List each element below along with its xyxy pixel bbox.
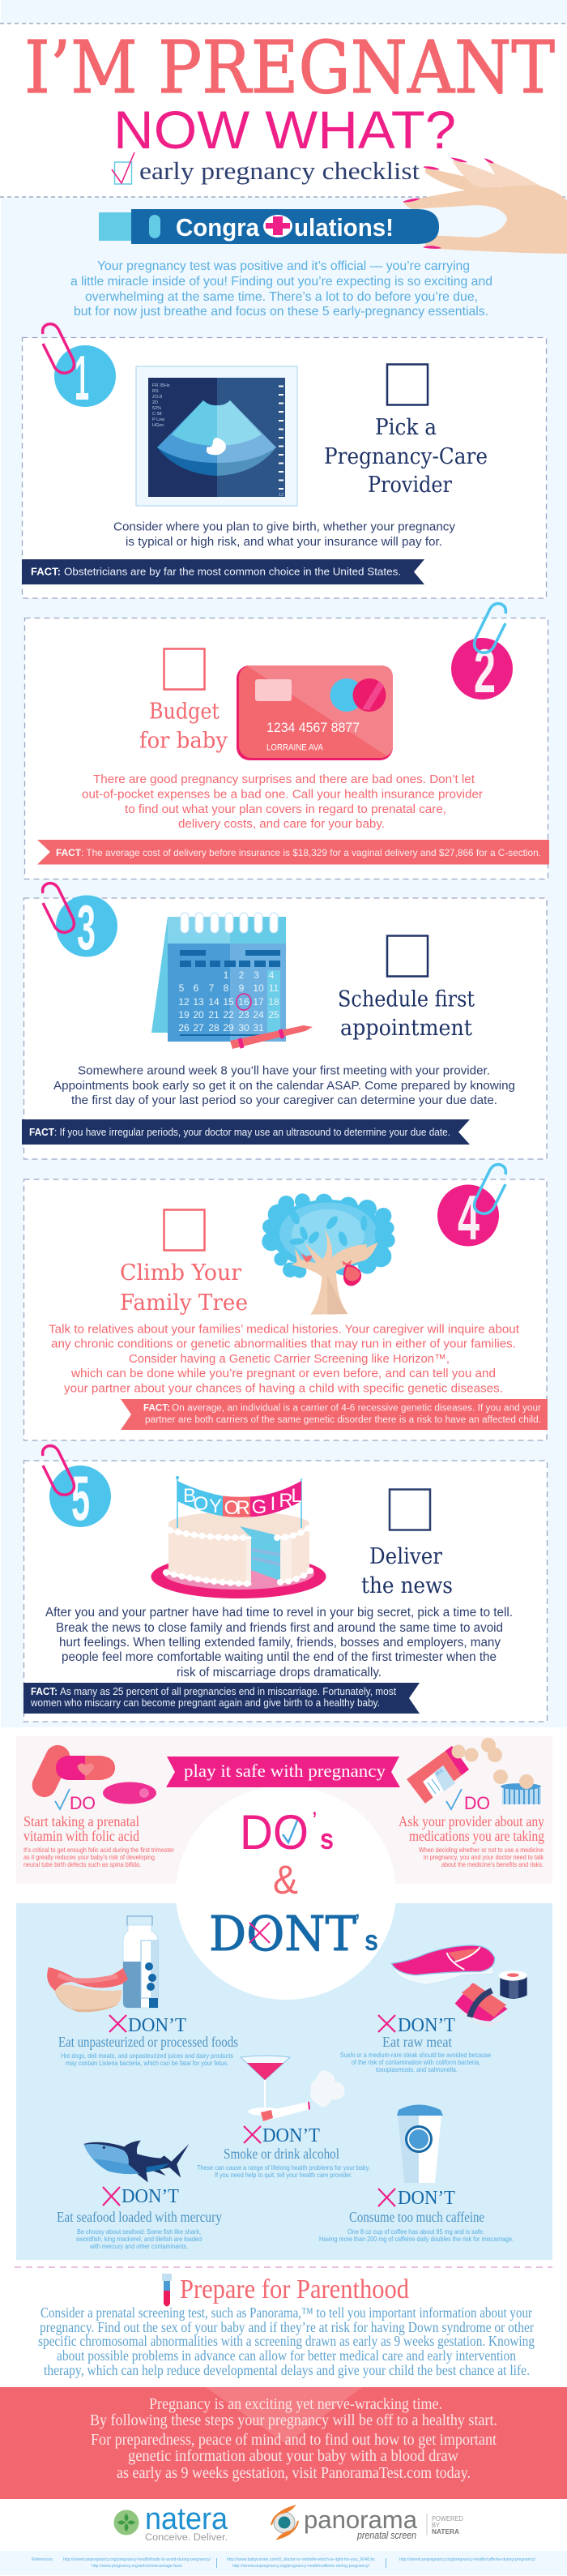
heading [361,1544,453,1598]
heading: congratulations [176,213,394,242]
don't mark: DON’T [398,2188,455,2209]
body text [82,772,483,831]
icon: calendar: 17 [253,996,264,1008]
panel: closing message: By following these steps your pregnancy will be off to a healthy start. [90,2412,497,2429]
icon: coffee cup [397,2104,443,2183]
fact ribbon: women who miscarry can become pregnant again and give birth to a healthy baby. [30,1697,380,1709]
fact ribbon: As many as 25 percent of all pregnancies end in miscarriage. Fortunately, most [60,1686,396,1697]
panel: step 2 budget for baby [24,604,549,879]
trunk and branches [292,1230,378,1315]
don't: raw meat [340,1945,527,2073]
logo: panorama [271,2505,463,2541]
heading: Pick a [375,415,437,440]
paragraph [38,2304,535,2378]
panel: closing message [0,2387,567,2499]
text: Smoke or drink alcohol [224,2146,339,2162]
sushi roll [499,1971,527,1999]
banner: boy or girl: R [279,1490,293,1512]
heading [139,699,228,754]
banner: play it safe [166,1757,400,1787]
number badge 3: 3 [77,892,96,963]
references [0,2551,567,2575]
body text [49,1323,520,1396]
number badge 4: 4 [458,1182,480,1253]
fact ribbon: : If you have irregular periods, your doctor may use an ultrasound to determine your due date. [54,1127,450,1138]
references: http://americanpregnancy.org/pregnancy-health/caffeine-during-pregnancy/ [232,2564,369,2569]
body text: to find out what your plan covers in regard to prenatal care, [125,802,446,816]
heading: the news [361,1573,453,1598]
icon: calendar [151,913,313,1049]
don't: processed foods [47,1916,238,2067]
icon: calendar: 13 [193,996,204,1008]
text: Start taking a prenatal [23,1813,139,1829]
logo: natera: Conceive. Deliver. [145,2533,228,2543]
fact ribbon: FACT: [31,1686,58,1697]
icon: test stick [99,209,439,244]
number badge 1: 1 [75,342,89,413]
icon: blood test tube [162,2274,172,2307]
body text [45,1606,513,1680]
icon: calendar: 26 [178,1022,190,1033]
icon: credit card: 1234 4567 8877 [266,720,360,735]
icon: calendar: 8 [224,982,229,994]
heading: Pregnancy-Care [324,444,488,469]
icon: ultrasound: ZO.8 [152,395,162,400]
panel: closing message: genetic information about your baby with a blood draw [128,2448,458,2465]
logo: natera [113,2502,228,2543]
icon: calendar: 31 [253,1022,264,1033]
baby bundle [342,1260,361,1286]
icon: calendar: 27 [193,1022,204,1033]
icon: calendar: 9 [239,982,245,994]
body text: There are good pregnancy surprises and there are bad ones. Don’t let [93,772,475,786]
intro text: Your pregnancy test was positive and it’s official — you’re carrying [97,259,470,273]
don'ts: DONT [209,1906,356,1962]
icon: calendar: 20 [193,1009,204,1021]
text [319,2209,514,2243]
banner: boy or girl: G [252,1496,266,1518]
logo: panorama: POWERED [432,2515,463,2523]
icon: bottle cap [501,1774,541,1804]
intro text: overwhelming at the same time. There’s a lot to do before you’re due, [85,290,478,304]
panel: closing message: as early as 9 weeks gestation, visit PanoramaTest.com today. [117,2465,471,2482]
don't mark: DON’T [128,2015,186,2036]
number badge 4 [437,1165,505,1253]
body text: any chronic conditions or genetic abnormalities that may run in either of your families. [51,1337,516,1350]
logo: panorama: NATERA [432,2528,459,2535]
icon: calendar: 28 [208,1022,220,1033]
icon: calendar: 2 [239,969,245,981]
paragraph: about possible problems in advance can allow for better medical care and early intervention [57,2347,516,2364]
do's: s [320,1822,334,1855]
banner: boy or girl: R [236,1497,250,1519]
heading: Schedule first [338,987,475,1012]
fact ribbon [23,1683,420,1714]
text [57,2209,222,2250]
body text: the first day of your last period so your caregiver can determine your due date. [71,1093,497,1107]
text: as it greatly reduces your baby’s risk of developing [23,1853,155,1861]
heading: Provider [368,473,452,498]
icon: vitamin pills [28,1741,156,1804]
icon: calendar: 5 [179,982,185,994]
body text: people feel more comfortable waiting until the end of the first trimester when the [62,1650,497,1664]
text: These can cause a range of lifelong health problems for your baby. [197,2163,370,2172]
white centre oval [176,1786,396,2000]
icon: family tree [262,1193,395,1315]
icon: calendar: 25 [268,1009,279,1021]
do mark [446,1789,490,1813]
icon: calendar: 6 [194,982,199,994]
icon: cake [151,1476,326,1598]
icon: ultrasound: FR 35Hz [152,383,170,388]
logo: panorama: prenatal screen [356,2529,416,2541]
fact ribbon: On average, an individual is a carrier of 4-6 recessive genetic diseases. If you and your [172,1404,541,1414]
heading: Family Tree [120,1290,248,1316]
ampersand: & [273,1857,298,1902]
illustration: hand holding pregnancy test [99,158,567,254]
number badge 5 [43,1446,111,1534]
text: Consume too much caffeine [349,2209,484,2225]
text: vitamin with folic acid [23,1828,139,1844]
text: Sushi or a medium-rare steak should be avoided because [340,2051,491,2059]
don'ts: ’ [355,1910,360,1936]
body text [113,520,456,549]
number badge 5: 5 [71,1462,90,1534]
number badge 2: 2 [474,637,496,706]
panel: step 4 climb your family tree [24,1165,548,1440]
fact ribbon: FACT: [143,1404,170,1414]
do: ask about medications [399,1738,544,1868]
text: with mercury and other contaminants. [89,2242,188,2250]
references: http://www.babycenter.com/0_doctor-or-midwife-which-is-right-for-you_9048.bc [227,2557,375,2562]
icon: shark [83,2141,189,2182]
icon: pill bottle: RX [435,1768,445,1778]
section: prepare for parenthood [38,2274,535,2378]
don'ts: s [364,1923,378,1957]
banner: boy or girl: O [194,1493,208,1515]
heading: Budget [149,699,220,725]
fact ribbon: : The average cost of delivery before insurance is $18,329 for a vaginal delivery and $27,866 for a C-section. [81,847,541,858]
icon: calendar: 15 [223,996,234,1008]
icon: ultrasound: 12 [279,493,284,498]
do mark [55,1789,96,1813]
icon: calendar: 3 [254,969,259,981]
body text: your partner about your chances of having a child with specific genetic diseases. [64,1381,503,1396]
banner: boy or girl: Y [209,1496,222,1517]
do mark: DO [464,1793,490,1813]
icon: calendar: 7 [209,982,215,994]
checkbox [390,1490,430,1530]
panel: closing message: Pregnancy is an exciting yet nerve-wracking time. [149,2396,442,2413]
text: swordfish, king mackerel, and tilefish are loaded [76,2235,202,2243]
text: Hot dogs, deli meats, and unpasteurized juices and dairy products [61,2052,233,2060]
panel: step 1 pick a provider [22,324,546,598]
icon: calendar: 16 [238,996,249,1008]
checkbox [164,648,204,689]
icon: calendar: 24 [253,1009,264,1021]
icon: calendar: 23 [238,1009,249,1021]
icon: steak and sushi [391,1945,527,2028]
intro text [70,259,492,319]
heading: Deliver [369,1544,442,1569]
icon: credit card: LORRAINE AVA [266,742,324,752]
icon: juice bottle [123,1916,158,2008]
text [58,2034,238,2067]
body text [53,1063,515,1107]
heading: congratulations: Congra [176,213,260,242]
text [340,2034,491,2073]
icon: calendar: 12 [178,996,190,1008]
icon: martini [241,2056,290,2116]
banner: boy or girl: O [224,1497,239,1519]
text: Eat seafood loaded with mercury [57,2209,222,2225]
fact ribbon: Obstetricians are by far the most common choice in the United States. [64,566,401,577]
banner: boy or girl: I [271,1493,275,1515]
number badge 2 [451,604,513,706]
text: One 8 oz cup of coffee has about 95 mg and is safe. [347,2227,484,2236]
icon: calendar: 21 [208,1009,220,1021]
body text: Somewhere around week 8 you’ll have your first meeting with your provider. [78,1063,490,1078]
nigiri [455,1983,508,2028]
banner: boy or girl: L [291,1485,302,1507]
banner: boy or girl: B [183,1485,196,1507]
text: If you need help to quit, tell your health care provider. [215,2171,352,2179]
don't: mercury seafood [57,2141,222,2250]
icon: calendar: 22 [223,1009,234,1021]
heading [324,415,488,498]
references: http://www.pregnancy.org/article/miscarriage-facts [92,2564,182,2569]
do's: ’ [312,1808,318,1834]
text: When deciding whether or not to use a medicine [419,1846,544,1854]
body text: out-of-pocket expenses be a bad one. Call your health insurance provider [82,788,483,801]
body text: Consider having a Genetic Carrier Screening like Horizon™, [129,1352,450,1366]
text: Eat unpasteurized or processed foods [58,2034,238,2050]
text [197,2146,370,2179]
fact ribbon: partner are both carriers of the same genetic disorder there is a risk to have an affected child. [145,1415,541,1425]
fact ribbon [22,559,424,584]
heading: do's and don'ts [209,1805,378,1962]
fact ribbon [22,1119,470,1145]
icon: ultrasound: 52% [152,406,161,411]
text: It’s critical to get enough folic acid during the first trimester [23,1846,174,1854]
logo: panorama: BY [432,2522,441,2529]
references: http://americanpregnancy.org/pregnancy-health/foods-to-avoid-during-pregnancy/ [63,2557,211,2562]
panel: do's background [16,1736,552,1884]
banner: play it safe: play it safe with pregnancy [184,1761,386,1781]
don't: smoke or drink [197,2056,370,2179]
icon: calendar: 19 [178,1009,190,1021]
fact ribbon: FACT: [31,566,61,577]
don't mark: DON’T [122,2186,179,2207]
text: neural tube birth defects such as spina bifida. [23,1860,141,1868]
body text: Talk to relatives about your families’ medical histories. Your caregiver will inquire about [49,1323,520,1336]
icon: checked box [112,152,134,184]
heading: for baby [139,728,228,754]
panel: step 5 deliver the news [23,1446,548,1722]
body text: Appointments book early so get it on the calendar ASAP. Come prepared by knowing [53,1079,515,1093]
icon: ultrasound: P Low [152,417,164,422]
bird [301,1253,312,1262]
icon: ultrasound: C 58 [152,412,162,417]
body text: is typical or high risk, and what your insurance will pay for. [126,535,442,549]
text: Be choosy about seafood: Some fish like shark, [77,2227,201,2236]
number badge 3 [43,884,117,963]
icon: credit card [237,665,393,760]
body text: risk of miscarriage drops dramatically. [177,1666,382,1680]
text: may contain Listeria bacteria, which can be fatal for your fetus. [66,2059,228,2067]
title: now what: NOW WHAT? [113,100,456,160]
icon: calendar: 11 [269,982,279,994]
do mark: DO [70,1793,96,1813]
text: toxoplasmosis, and salmonella. [376,2065,458,2073]
icon: ultrasound: HGen [152,423,164,428]
icon: pen [230,1025,313,1049]
icon: calendar: 10 [253,982,264,994]
checkbox [164,1209,204,1250]
heading [120,1260,248,1316]
body text: which can be done while you’re pregnant or even before, and can tell you and [70,1367,496,1380]
banner: boy or girl [176,1476,302,1528]
don't mark: DON’T [398,2015,455,2036]
number badge 1 [43,324,116,413]
panel: closing message: For preparedness, peace of mind and to find out how to get important [91,2432,497,2449]
icon: pill bottle [407,1738,541,1804]
icon: hand [403,158,567,254]
icon: calendar: 14 [208,996,220,1008]
body text: hurt feelings. When telling extended family, friends, bosses and employers, many [59,1636,501,1650]
don't mark: DON’T [262,2125,320,2146]
don't: too much caffeine [319,2104,514,2243]
body text: Consider where you plan to give birth, whether your pregnancy [113,520,456,533]
icon: hot dog [47,1967,128,2012]
subtitle: early pregnancy checklist [139,156,420,185]
logo: panorama: panorama [304,2505,418,2534]
icon: calendar: 30 [238,1022,249,1033]
do's: DO [240,1805,309,1859]
icon: calendar: 18 [268,996,279,1008]
text [399,1813,544,1868]
heading: Prepare for Parenthood [180,2274,409,2304]
panel: don'ts background [16,1903,552,2260]
logo: natera: natera [145,2502,228,2536]
fact ribbon [37,840,549,864]
icon: calendar: 29 [223,1022,234,1033]
text [23,1813,174,1868]
text: in pregnancy, you and your doctor need to talk [424,1853,544,1861]
icon: ultrasound [136,366,297,506]
fact ribbon: FACT [56,847,82,858]
body text: Break the news to close family and friends first and around the same time to avoid [56,1621,503,1635]
text: Eat raw meat [382,2034,452,2050]
icon: ultrasound: 2D [152,400,158,405]
heading: Climb Your [120,1260,241,1286]
body text: delivery costs, and care for your baby. [178,817,385,831]
do: prenatal vitamin [23,1741,174,1868]
text: medications you are taking [409,1828,544,1844]
intro text: a little miracle inside of you! Finding out you’re expecting is so exciting and [70,275,492,289]
checkbox [387,935,428,976]
text: about the medicine’s benefits and risks. [441,1860,544,1868]
intro text: but for now just breathe and focus on these 5 early-pregnancy essentials. [74,305,488,319]
text: Ask your provider about any [399,1813,544,1829]
heading [338,987,475,1041]
text: of the risk of contamination with coliform bacteria, [352,2058,480,2066]
body text: After you and your partner have had time to revel in your big secret, pick a time to tell. [45,1606,513,1620]
panel: step 3 schedule first appointment [22,884,547,1159]
references: http://americanpregnancy.org/pregnancy-health/caffeine-during-pregnancy/ [399,2557,535,2562]
icon: cigarette and smoke [261,2070,345,2121]
heading: appointment [340,1016,472,1041]
checkbox [387,365,428,405]
text: Having more than 200 mg of caffeine daily doubles the risk for miscarriage. [319,2235,514,2243]
icon: calendar: 1 [224,969,229,981]
icon: ultrasound: RS [152,389,159,394]
fact ribbon [121,1399,548,1430]
icon: calendar: 4 [269,969,275,981]
heading: congratulations: ulations! [294,213,394,242]
references: References: [32,2557,53,2562]
icon: panorama mark [271,2506,298,2539]
fact ribbon: FACT [29,1127,54,1138]
